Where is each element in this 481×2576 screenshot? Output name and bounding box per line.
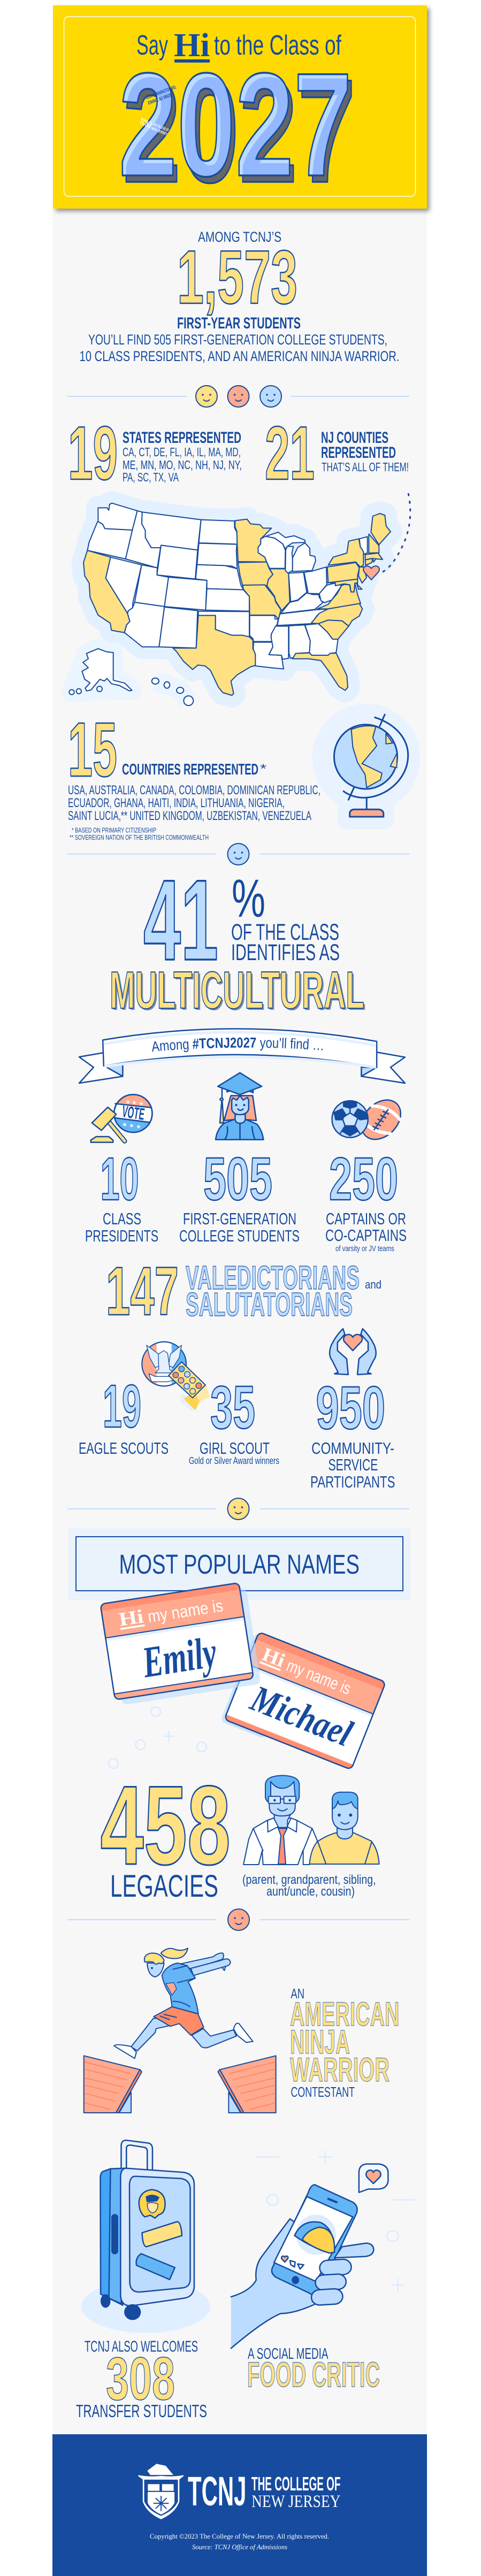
American Ninja Warrior text [290,1985,399,2100]
big year 2027: 2027 [123,49,356,213]
stat columns: 19, 35, 950: 950 [316,1374,385,1442]
right ramp [218,2056,276,2113]
header banner [53,5,427,213]
name tag: Emily: my name is [146,1596,224,1627]
transfer students text: TCNJ ALSO WELCOMES [85,2339,198,2356]
name tag: Emily: Emily [139,1628,220,1687]
458 legacies: (parent, grandparent, sibling, [242,1873,376,1887]
NJ counties represented: REPRESENTED [321,444,396,462]
footer: Copyright ©2023 The College of New Jersey. All rights reserved. [150,2532,329,2540]
TCNJ shield logo [139,2464,183,2519]
transfer students text [76,2339,207,2421]
states represented: STATES REPRESENTED [123,429,241,447]
41 percent multicultural: 41 [143,856,218,984]
divider with three smileys [67,386,409,407]
divider with blue smiley [67,844,409,865]
intro: class size: FIRST-YEAR STUDENTS [177,315,301,332]
states represented: ME, MN, MO, NC, NH, NJ, NY, [123,458,242,472]
divider with yellow smiley [67,1498,409,1520]
big year 2027: 2027 [119,43,352,207]
countries represented text: SAINT LUCIA,** UNITED KINGDOM, UZBEKISTAN, VENEZUELA [68,809,311,823]
number 1,573: 1,573 [177,235,297,320]
stat columns: 19, 35, 950: EAGLE SCOUTS [79,1439,169,1458]
states represented: CA, CT, DE, FL, IA, IL, MA, MD, [123,445,241,459]
458 legacies: 458 [101,1762,231,1888]
valedictorians and salutatorians: 147 [106,1253,179,1330]
VOTE label: VOTE [121,1102,146,1124]
left ramp [84,2056,142,2113]
header tagline: Hi [174,27,210,64]
458 legacies: aunt/uncle, cousin) [266,1884,355,1899]
footer: THE COLLEGE OF [251,2473,340,2495]
stat columns: 10, 505, 250: CLASS [103,1209,141,1228]
badge stars: ★ [139,1100,144,1107]
American Ninja Warrior text: CONTESTANT [291,2084,355,2100]
floating decor [256,2151,414,2291]
41 percent multicultural: OF THE CLASS [231,919,339,945]
icon: eagle scout badge and girl scout pin [141,1339,210,1412]
states represented [68,411,242,496]
countries represented text [68,707,320,841]
American Ninja Warrior text: AMERICAN [290,1996,399,2033]
US map [69,494,410,706]
header tagline: to the Class of [214,30,341,61]
states represented: 19 [68,411,118,496]
suitcase TCNJ sticker: THE COLLEGE OF [152,122,170,133]
lion sticker [139,2190,165,2218]
stat columns: 10, 505, 250: 250 [329,1145,398,1213]
41 percent multicultural [110,856,366,1021]
NJ counties represented: THAT’S ALL OF THEM! [322,460,409,474]
458 legacies [101,1762,376,1904]
countries represented text: ** SOVEREIGN NATION OF THE BRITISH COMMONWEALTH [70,833,209,841]
most popular names heading [68,1528,410,1600]
countries represented text: COUNTRIES REPRESENTED [122,761,258,778]
41 percent multicultural: % [232,869,265,929]
header tagline: Say [136,30,168,61]
stat columns: 19, 35, 950: SERVICE [329,1455,378,1474]
icon: vote badge and gavel [91,1093,154,1143]
stat columns: 19, 35, 950: GIRL SCOUT [200,1439,270,1458]
stat columns: 10, 505, 250: 10 [101,1145,139,1213]
name tag: Emily: Hi [117,1605,145,1630]
suitcase address label: EWING, NJ 08628 [147,92,172,106]
valedictorians and salutatorians: SALUTATORIANS [186,1286,353,1323]
states represented: PA, SC, TX, VA [123,470,179,484]
footer: TCNJ [188,2468,246,2514]
badge stars [122,1099,144,1130]
41 percent multicultural: IDENTIFIES AS [231,940,340,965]
graduation cap [218,1073,262,1094]
stat columns: 10, 505, 250: FIRST-GENERATION [183,1209,296,1228]
stat columns: 10, 505, 250: of varsity or JV teams [335,1244,394,1253]
fingers [334,2243,373,2258]
American Ninja Warrior text: NINJA [290,2023,350,2061]
taco [294,2222,334,2252]
social icons [281,2256,288,2262]
ribbon banner: Among #TCNJ2027 you’ll find … [152,1038,323,1053]
NJ counties represented: NJ COUNTIES [321,429,388,447]
divider with salmon smiley [67,1909,409,1930]
dotted line and NJ heart [363,494,410,580]
icon: legacy parent and student [243,1775,379,1865]
name tag: Michael: my name is [284,1655,354,1698]
countries represented text: * [260,762,266,776]
food critic text [247,2345,380,2394]
stat columns: 10, 505, 250: CO-CAPTAINS [325,1226,407,1245]
phone [272,2184,357,2295]
decorative circles [109,1707,207,1768]
header tagline [136,27,341,64]
footer: Source: TCNJ Office of Admissions [192,2543,287,2551]
suitcase address label: 2000 PENNINGTON RD. [145,84,177,100]
countries represented text: USA, AUSTRALIA, CANADA, COLOMBIA, DOMINICAN REPUBLIC, [68,783,320,798]
stat columns: 19, 35, 950 [79,1373,395,1491]
badge stars: ★ [129,1122,134,1129]
badge stars: ★ [136,1123,141,1130]
stat columns: 19, 35, 950: 35 [210,1374,255,1441]
content panel background [52,209,427,2434]
countries represented text: * BASED ON PRIMARY CITIZENSHIP [72,826,156,834]
illustration: ninja warrior jumping over ramps [84,1948,276,2113]
runner [114,1948,253,2058]
suitcase address label [145,84,179,106]
name tag: Michael: Michael [245,1678,358,1755]
stat columns: 19, 35, 950: COMMUNITY- [311,1439,394,1458]
name tag: Emily [101,1582,261,1706]
NJ counties represented: 21 [265,411,315,496]
countries represented text: ECUADOR, GHANA, HAITI, INDIA, LITHUANIA, NIGERIA, [68,796,285,810]
big year 2027 [122,72,352,184]
big year 2027: 2027 [123,47,356,211]
American Ninja Warrior text: WARRIOR [290,2051,390,2089]
ribbon banner [78,1028,406,1084]
stat columns: 19, 35, 950: PARTICIPANTS [310,1473,395,1491]
American Ninja Warrior text: AN [291,1985,304,2002]
transfer students text: TRANSFER STUDENTS [76,2401,207,2421]
icon: graduate [216,1086,263,1140]
stat columns: 19, 35, 950: Gold or Silver Award winners [189,1455,279,1466]
badge stars: ★ [122,1121,127,1128]
food critic text: FOOD CRITIC [247,2355,380,2394]
transfer students text: 308 [106,2345,175,2412]
intro: class size: AMONG TCNJ’S [198,229,281,245]
illustration: hand holding phone with taco [231,2151,414,2348]
name tag: Michael: Hi [259,1643,288,1672]
valedictorians and salutatorians [106,1253,381,1330]
big year 2027: 2027 [119,43,352,207]
intro: class size [79,229,399,364]
most popular names heading: MOST POPULAR NAMES [119,1549,360,1580]
badge stars: ★ [125,1099,131,1106]
icon: globe [312,703,421,829]
illustration: suitcase [81,2140,210,2333]
stat columns: 10, 505, 250: PRESIDENTS [85,1226,158,1245]
badge stars: ★ [132,1099,137,1106]
stat columns: 10, 505, 250: CAPTAINS OR [326,1209,406,1228]
valedictorians and salutatorians: VALEDICTORIANS [186,1260,360,1297]
458 legacies: LEGACIES [110,1869,218,1904]
countries represented text: 15 [68,707,117,793]
name tag: Michael [220,1631,386,1773]
footer: NEW JERSEY [251,2492,340,2511]
speech bubble with heart [359,2164,388,2192]
stat columns: 10, 505, 250: 505 [203,1145,272,1213]
suitcase TCNJ sticker: TCNJ [138,116,153,130]
NJ counties represented [265,411,409,496]
Alaska and Hawaii [69,649,193,706]
valedictorians and salutatorians: and [365,1278,381,1291]
stat columns: 10, 505, 250 [85,1145,407,1253]
icon: caring hands with heart [330,1329,376,1375]
icon: soccer ball and football [332,1094,409,1145]
food critic text: A SOCIAL MEDIA [248,2345,329,2363]
hand palm [231,2219,313,2348]
footer [52,2434,427,2576]
stat columns: 10, 505, 250: COLLEGE STUDENTS [179,1226,300,1245]
stat columns: 19, 35, 950: 19 [103,1373,141,1440]
suitcase TCNJ sticker: NEW JERSEY [150,127,168,136]
